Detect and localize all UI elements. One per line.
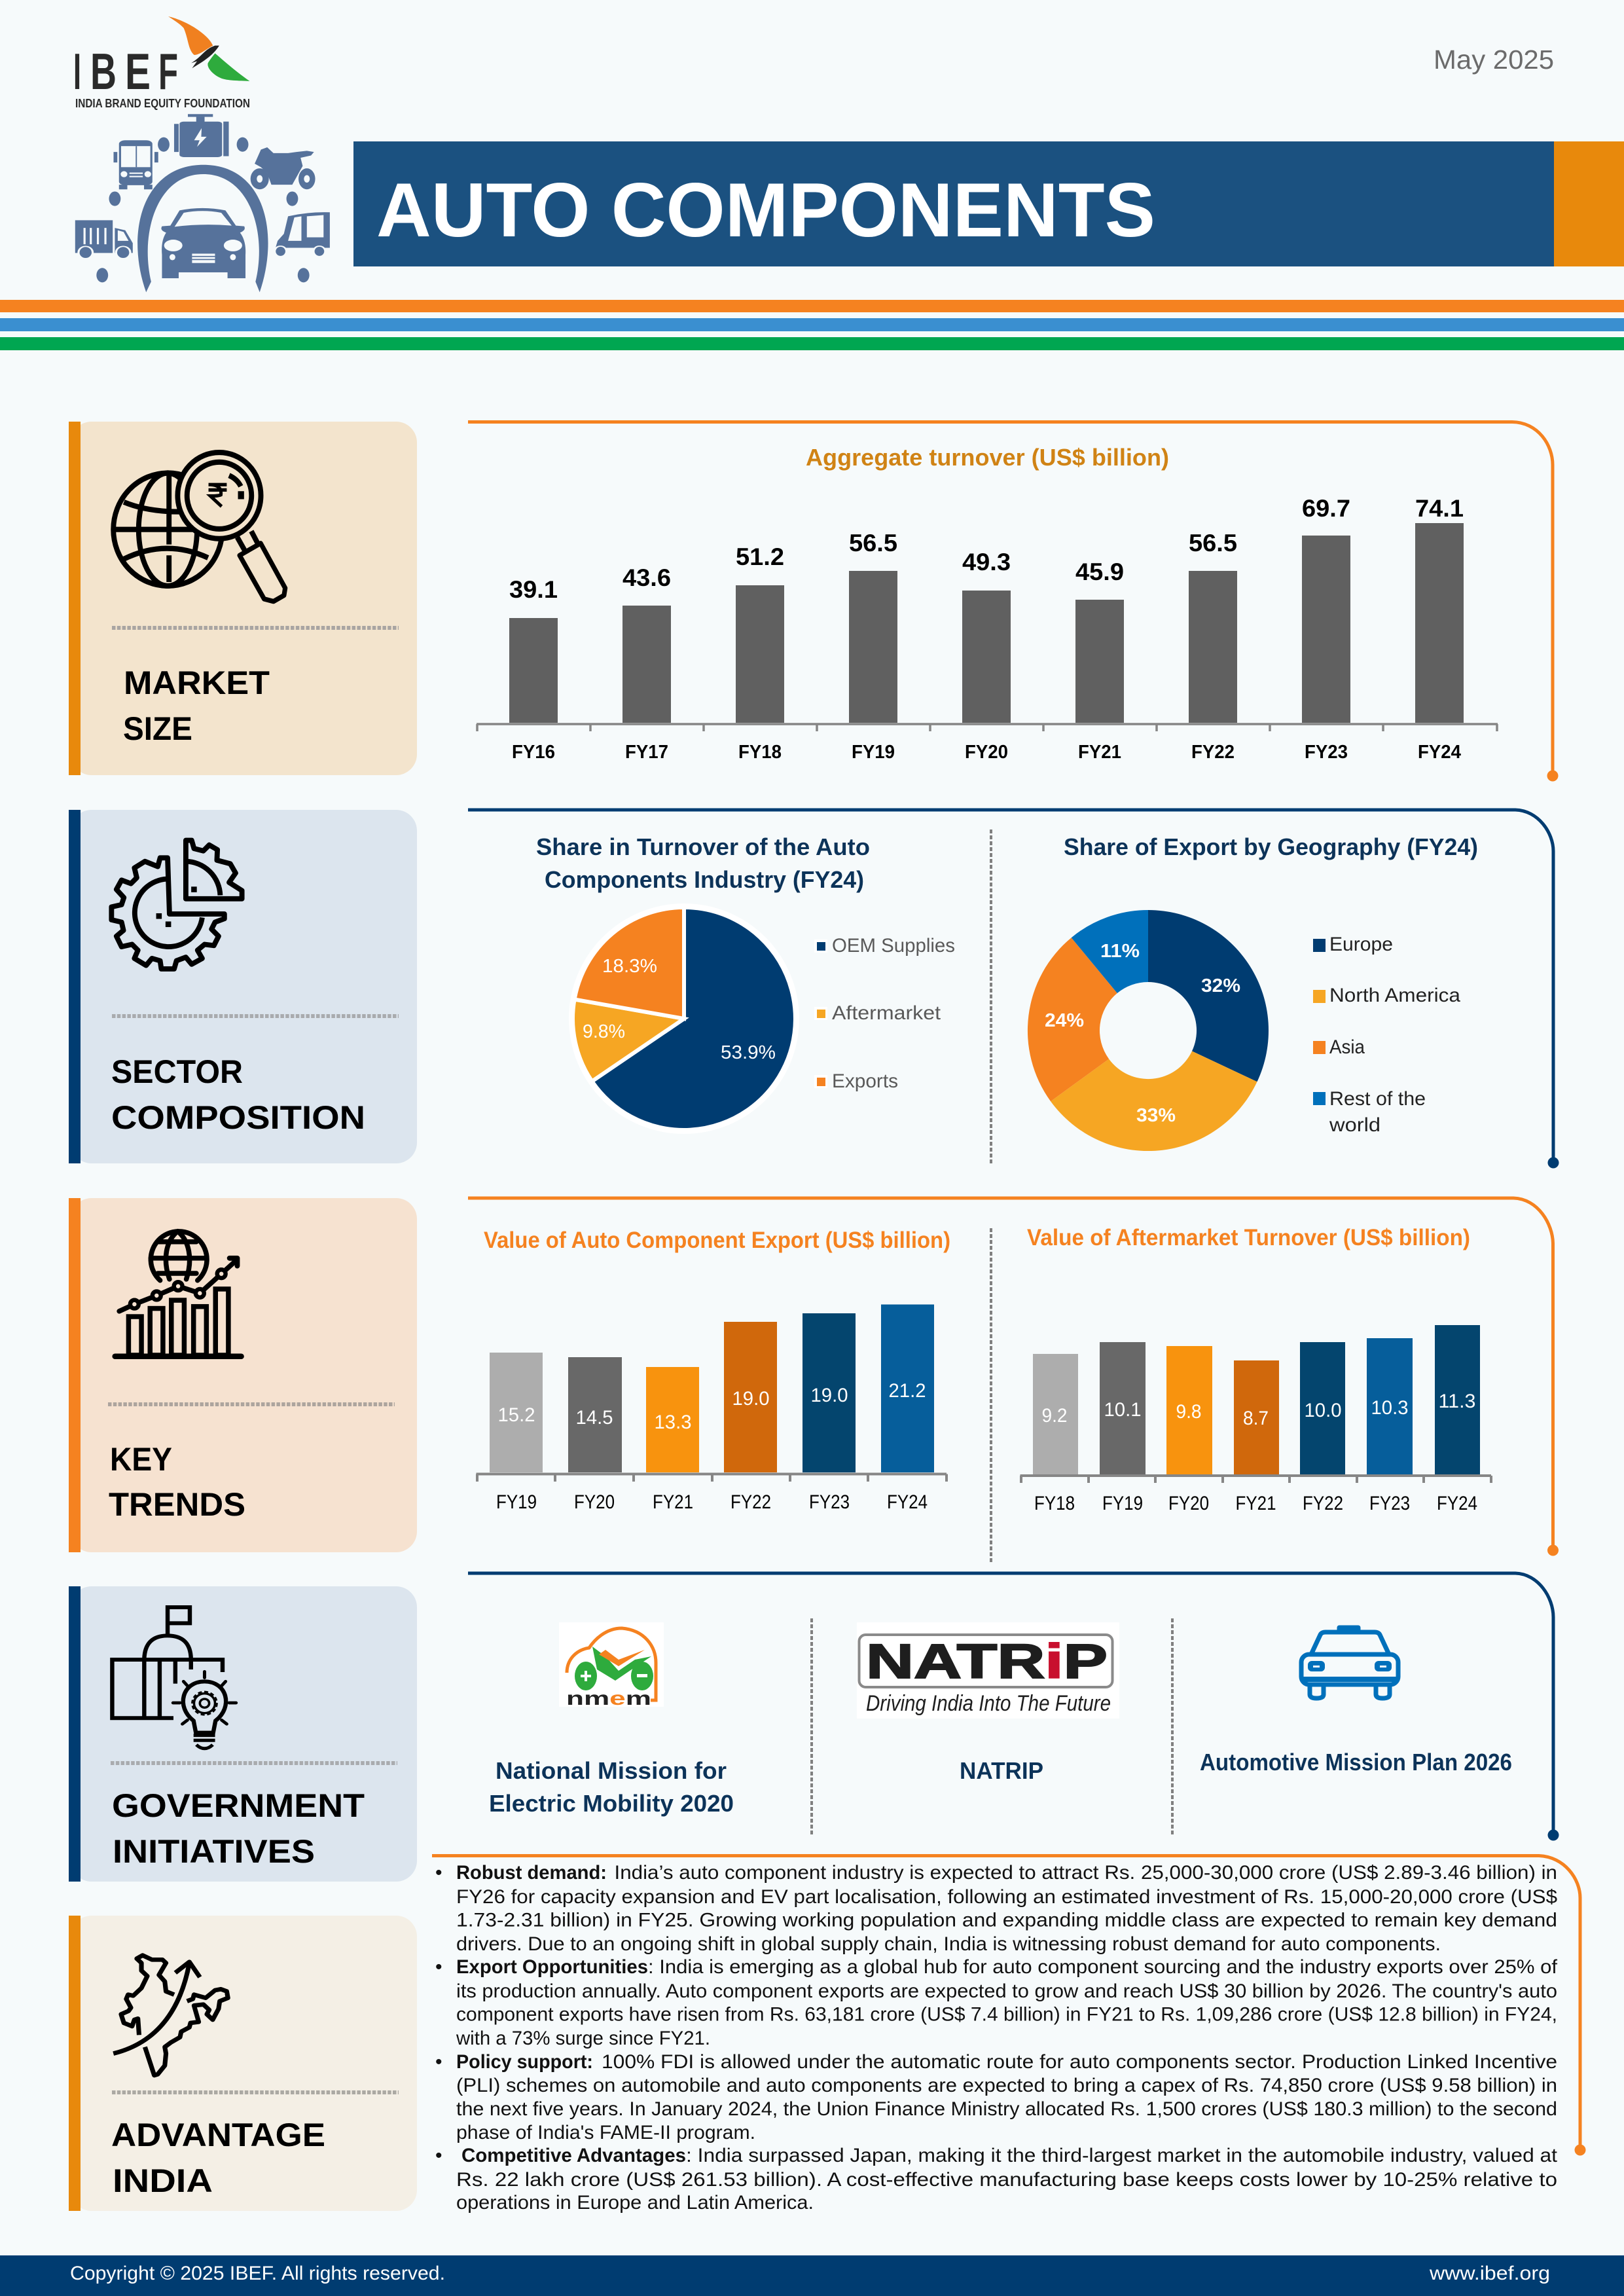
icon: natrip logo: NATR iP	[866, 1634, 1108, 1688]
icon: blue car	[1301, 1628, 1398, 1698]
point: export opportunities	[435, 1956, 1558, 2049]
bar values: 74.1	[1415, 495, 1464, 522]
point: competitive advantages: •	[435, 2145, 442, 2166]
bar values: 10.1	[1104, 1399, 1142, 1421]
axis labels: FY20	[965, 742, 1008, 763]
slice labels: 24%	[1045, 1010, 1084, 1031]
point: export opportunities: •	[435, 1956, 442, 1978]
icon: india map with arrow	[113, 1956, 228, 2075]
axis labels: FY24	[887, 1491, 928, 1513]
bar values: 11.3	[1439, 1391, 1475, 1412]
panel: market size	[69, 422, 417, 775]
legend: Exports	[832, 1070, 898, 1092]
axis labels: FY19	[496, 1491, 537, 1513]
initiative label: Automotive Mission Plan 2026	[1200, 1749, 1512, 1776]
chart title: Value of Aftermarket Turnover (US$ billion)	[1027, 1225, 1470, 1250]
heading: government initiatives: GOVERNMENT	[112, 1787, 365, 1824]
heading: key trends: KEY	[110, 1441, 172, 1478]
point: competitive advantages: operations in Europe and Latin America.	[456, 2192, 814, 2214]
bar values: 15.2	[497, 1404, 535, 1426]
bars	[1033, 1325, 1480, 1475]
panel: sector composition	[69, 810, 417, 1163]
chart title: Value of Auto Component Export (US$ billion)	[484, 1228, 950, 1253]
initiative label: National Mission for	[496, 1757, 727, 1784]
axis labels	[512, 742, 1461, 763]
IBEF logo: B	[90, 43, 117, 100]
heading: market size: MARKET	[124, 665, 270, 701]
initiative: national mission for electric mobility	[489, 1622, 734, 1817]
header stripes	[0, 300, 1624, 350]
bar values: 49.3	[962, 549, 1011, 575]
IBEF logo	[73, 16, 250, 110]
footer: Copyright © 2025 IBEF. All rights reserved.	[70, 2263, 445, 2284]
chart title: Share in Turnover of the Auto	[536, 833, 870, 860]
bar values	[509, 495, 1464, 603]
bar values	[497, 1380, 926, 1433]
bar values: 69.7	[1302, 495, 1350, 522]
axis labels: FY18	[738, 742, 782, 763]
point: robust demand: •	[435, 1862, 442, 1884]
slice labels: 33%	[1136, 1105, 1176, 1126]
icon: nmem logo: nm e m	[566, 1688, 651, 1709]
icon: globe with magnifier	[113, 452, 285, 602]
icon: globe and rising bar chart	[115, 1231, 242, 1357]
footer	[0, 2255, 1624, 2296]
IBEF logo: I	[73, 43, 81, 100]
initiative label: Electric Mobility 2020	[489, 1790, 734, 1817]
slice labels	[583, 956, 776, 1063]
legend	[814, 935, 955, 1092]
legend	[1313, 934, 1460, 1136]
panel: key trends	[69, 1198, 417, 1552]
point: policy support	[435, 2051, 1557, 2143]
bar values: 8.7	[1243, 1408, 1269, 1429]
axis labels: FY17	[625, 742, 668, 763]
IBEF logo: E	[125, 43, 151, 100]
chart: value of aftermarket turnover	[1020, 1225, 1491, 1514]
bar values: 10.0	[1304, 1400, 1342, 1421]
point: export opportunities: component exports have risen from Rs. 63,181 crore (US$ 7.4 billion) in FY21 to Rs. 1,09,286 crore (US$ 12.8 billion) in FY24,	[456, 2003, 1557, 2026]
slice labels: 53.9%	[721, 1042, 776, 1063]
axis labels: FY22	[731, 1491, 771, 1513]
axis labels: FY21	[653, 1491, 693, 1513]
icon: nmem logo	[559, 1622, 664, 1709]
footer: www.ibef.org	[1429, 2263, 1550, 2284]
chart: share of export donut	[1028, 833, 1478, 1151]
initiative: natrip	[857, 1622, 1119, 1784]
heading: market size	[123, 665, 270, 747]
chart title: Components Industry (FY24)	[545, 866, 864, 893]
heading: advantage india: ADVANTAGE	[111, 2117, 325, 2153]
date: May 2025	[1434, 45, 1554, 75]
axis labels	[496, 1491, 928, 1513]
legend: Europe	[1329, 934, 1393, 955]
axis labels: FY23	[1369, 1493, 1410, 1514]
bars	[509, 523, 1464, 723]
bar values: 39.1	[509, 576, 558, 603]
axis labels: FY21	[1078, 742, 1121, 763]
bar values: 9.2	[1042, 1405, 1067, 1427]
bar values: 21.2	[889, 1380, 926, 1402]
title banner: AUTO COMPONENTS	[376, 167, 1155, 253]
legend: world	[1329, 1114, 1380, 1136]
bar values: 45.9	[1075, 558, 1124, 585]
IBEF logo: F	[158, 43, 178, 100]
axis labels: FY22	[1303, 1493, 1343, 1514]
axis labels: FY18	[1034, 1493, 1075, 1514]
icon: gear with pie segment	[111, 841, 242, 969]
heading: advantage india: INDIA	[113, 2162, 213, 2199]
section frame: key trends	[468, 1198, 1559, 1564]
axis labels: FY24	[1418, 742, 1461, 763]
chart title	[536, 833, 870, 893]
bar values: 9.8	[1176, 1401, 1202, 1423]
point: competitive advantages: : India surpassed Japan, making it the third-largest market in the automobile industry, valued at	[686, 2145, 1558, 2166]
heading: sector composition	[111, 1053, 365, 1136]
IBEF logo: INDIA BRAND EQUITY FOUNDATION	[75, 97, 250, 110]
chart: share in turnover pie	[536, 833, 955, 1134]
initiative label: NATRIP	[960, 1757, 1043, 1784]
slice labels	[1045, 941, 1240, 1126]
point: export opportunities: with a 73% surge since FY21.	[456, 2028, 710, 2049]
text block: advantage india points	[435, 1862, 1558, 2214]
point: robust demand: drivers. Due to an ongoing shift in global supply chain, India is witnessing robust demand for auto components.	[456, 1933, 1441, 1955]
point: competitive advantages: Competitive Advantages	[461, 2145, 686, 2166]
legend: Aftermarket	[832, 1002, 941, 1024]
bars	[490, 1304, 934, 1472]
heading: key trends: TRENDS	[109, 1486, 245, 1523]
chart: aggregate turnover	[468, 422, 1558, 782]
panel: government initiatives	[69, 1586, 417, 1882]
point: export opportunities: : India is emerging as a global hub for auto component sourcing and the industry exports over 25% of	[648, 1956, 1558, 1978]
axis labels: FY22	[1191, 742, 1235, 763]
axis labels: FY23	[1305, 742, 1348, 763]
icon: government building with bulb	[112, 1607, 236, 1749]
slice labels: 32%	[1201, 975, 1240, 996]
bar values: 56.5	[849, 530, 897, 556]
section frame: sector composition	[468, 810, 1559, 1168]
slice labels: 18.3%	[602, 956, 657, 977]
legend: North America	[1329, 985, 1460, 1006]
point: policy support: the next five years. In January 2024, the Union Finance Ministry allocated Rs. 1,500 crores (US$ 180.3 million) to the second	[456, 2098, 1557, 2120]
legend: Rest of the	[1329, 1088, 1426, 1110]
point: robust demand: FY26 for capacity expansion and EV part localisation, following an estimated investment of Rs. 15,000-20,000 crore (US$	[456, 1886, 1557, 1908]
point: policy support: (PLI) schemes on automobile and auto components are expected to bring a capex of Rs. 74,850 crore (US$ 9.58 billion) in	[456, 2075, 1557, 2096]
slice labels: 9.8%	[583, 1021, 625, 1042]
axis labels: FY21	[1236, 1493, 1276, 1514]
point: robust demand	[435, 1862, 1557, 1955]
axis labels: FY20	[1168, 1493, 1209, 1514]
point: export opportunities: its production annually. Auto component exports are expected to grow and reach US$ 30 billion by 2026. The country's auto	[456, 1980, 1557, 2002]
heading: advantage india	[111, 2117, 325, 2199]
chart title: Share of Export by Geography (FY24)	[1064, 833, 1478, 860]
heading: sector composition: COMPOSITION	[111, 1099, 365, 1136]
point: policy support: •	[435, 2051, 442, 2073]
legend: OEM Supplies	[832, 935, 955, 957]
point: export opportunities: Export Opportunities	[456, 1956, 648, 1978]
point: robust demand: Robust demand:	[456, 1862, 607, 1884]
bar values: 19.0	[810, 1385, 848, 1406]
chart: value of auto component export	[477, 1228, 950, 1513]
heading: government initiatives: INITIATIVES	[113, 1833, 315, 1870]
bar values: 14.5	[576, 1407, 613, 1429]
bar values: 43.6	[623, 564, 671, 591]
section frame: advantage india	[432, 1855, 1585, 2155]
icon: vehicles emblem	[75, 114, 330, 292]
bar values	[1042, 1391, 1475, 1429]
slice labels: 11%	[1100, 941, 1140, 962]
point: policy support: phase of India's FAME-II program.	[456, 2122, 755, 2143]
initiative label	[489, 1757, 734, 1817]
point: competitive advantages	[435, 2145, 1558, 2214]
axis labels	[1034, 1493, 1477, 1514]
bar values: 19.0	[732, 1388, 770, 1410]
axis labels: FY20	[574, 1491, 615, 1513]
point: policy support: Policy support:	[456, 2051, 593, 2073]
point: robust demand: India’s auto component industry is expected to attract Rs. 25,000-30,000 crore (US$ 2.89-3.46 billion) in	[614, 1862, 1557, 1884]
bar values: 51.2	[736, 543, 784, 570]
heading: market size: SIZE	[123, 710, 192, 747]
icon: natrip logo	[857, 1622, 1119, 1719]
axis labels: FY16	[512, 742, 555, 763]
initiative: automotive mission plan	[1200, 1628, 1512, 1776]
bar values: 10.3	[1371, 1397, 1409, 1419]
axis labels: FY19	[852, 742, 895, 763]
heading: key trends	[109, 1441, 245, 1523]
heading: government initiatives	[112, 1787, 365, 1870]
section frame: government initiatives	[468, 1573, 1559, 1841]
axis labels: FY23	[809, 1491, 850, 1513]
icon: natrip logo: Driving India Into The Future	[866, 1691, 1111, 1716]
axis labels: FY24	[1437, 1493, 1477, 1514]
bar values: 56.5	[1189, 530, 1237, 556]
point: policy support: 100% FDI is allowed under the automatic route for auto components sector. Production Linked Incentive	[602, 2051, 1557, 2073]
legend: Asia	[1329, 1036, 1365, 1058]
axis labels: FY19	[1102, 1493, 1143, 1514]
point: competitive advantages: Rs. 22 lakh crore (US$ 261.53 billion). A cost-effective manufacturing base keeps costs lower by 10-25% relative to	[456, 2169, 1557, 2191]
bar values: 13.3	[655, 1412, 691, 1433]
heading: sector composition: SECTOR	[111, 1053, 243, 1090]
title banner	[353, 141, 1624, 266]
point: robust demand: 1.73-2.31 billion) in FY25. Growing working population and expanding middle class are expected to remain key demand	[456, 1909, 1557, 1931]
chart title: Aggregate turnover (US$ billion)	[806, 444, 1169, 471]
panel: advantage india	[69, 1916, 417, 2211]
